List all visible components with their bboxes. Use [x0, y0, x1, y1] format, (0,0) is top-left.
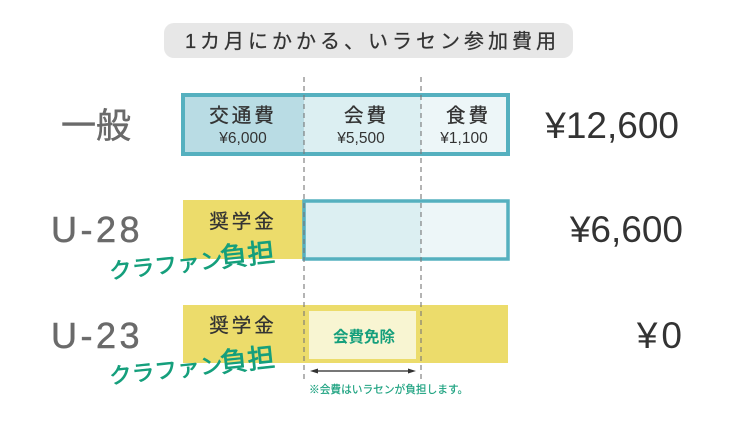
- scholarship block: U-28: 奨学金: [209, 211, 277, 233]
- segment: membership: 会費: [344, 105, 389, 127]
- row label: U-23: U-23: [51, 315, 143, 356]
- total: general: ¥12,600: [544, 105, 679, 146]
- row label: general: 一般: [61, 107, 131, 146]
- fee waived box: 会費免除: [333, 327, 395, 346]
- cost bar: general: [183, 95, 508, 154]
- segment: transport: [209, 105, 277, 147]
- scholarship block: U-23: [183, 305, 508, 363]
- double arrow: [310, 368, 416, 374]
- dashed guides: [304, 77, 421, 381]
- handwritten note: U-23: [108, 342, 276, 389]
- cost bar: U-28: [304, 201, 508, 259]
- handwritten note: U-28: 負担: [218, 237, 276, 273]
- segment: food: 食費: [446, 105, 491, 127]
- footnote: ※会費はいラセンが負担します。: [309, 383, 468, 396]
- handwritten note: U-28: クラファン: [108, 247, 224, 284]
- total: U-23: ¥0: [636, 315, 686, 356]
- segment: food: [439, 105, 491, 147]
- handwritten note: U-28: [108, 237, 276, 284]
- row: general: [61, 95, 679, 154]
- scholarship block: U-23: 奨学金: [209, 315, 277, 337]
- segment: transport: 交通費: [209, 105, 277, 127]
- fee waived box: [309, 311, 416, 359]
- row: U-23: [51, 305, 686, 363]
- scholarship block: U-28: [183, 200, 303, 259]
- title: [164, 23, 573, 58]
- handwritten note: U-23: クラファン: [108, 352, 224, 389]
- segment: membership: [336, 105, 389, 147]
- segment: food: ¥1,100: [439, 130, 488, 147]
- row: U-28: [51, 200, 683, 259]
- total: U-28: ¥6,600: [569, 209, 683, 250]
- segment: transport: ¥6,000: [218, 130, 267, 147]
- handwritten note: U-23: 負担: [218, 342, 276, 378]
- row label: U-28: U-28: [51, 209, 143, 250]
- title: 1カ月にかかる、いラセン参加費用: [185, 30, 560, 53]
- segment: membership: ¥5,500: [336, 130, 385, 147]
